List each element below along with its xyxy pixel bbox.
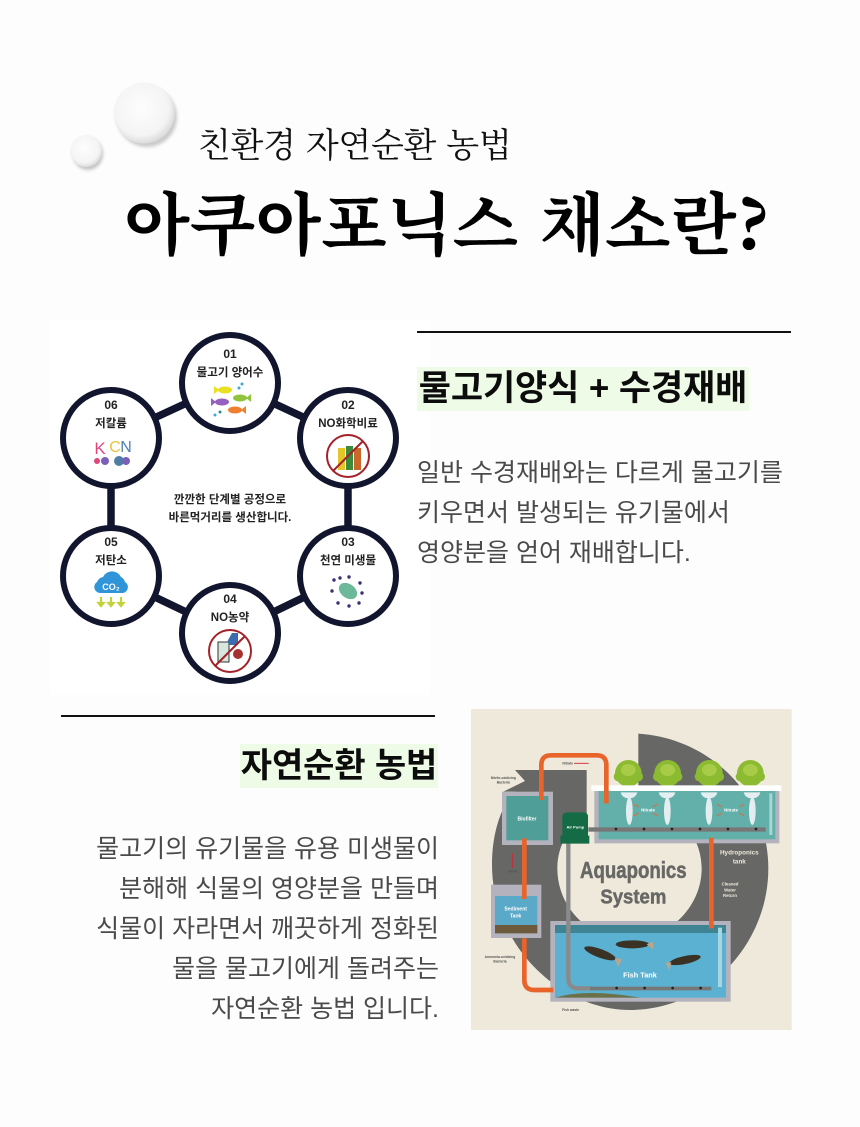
step 06: C	[109, 439, 121, 456]
small labels: Nitrite-oxidizing	[491, 776, 516, 780]
step 05: CO₂	[102, 582, 120, 592]
step 03: 03	[341, 535, 355, 549]
ring labels: tank	[733, 859, 746, 866]
sediment tank	[491, 885, 541, 938]
orange pipes	[524, 755, 711, 990]
arrows	[512, 763, 589, 868]
hydroponics tank: Nitrate	[641, 808, 655, 813]
step 06	[63, 390, 159, 486]
step 04: NO농약	[211, 611, 250, 624]
ring labels: Hydroponics	[720, 849, 759, 856]
panel: six-step cycle diagram	[60, 332, 399, 684]
air pump: Air Pump	[566, 825, 585, 830]
text block: description one: 일반 수경재배와는 다르게 물고기를	[417, 459, 783, 487]
step 03	[300, 528, 396, 624]
step 02: 02	[341, 398, 355, 412]
text block: description two: 분해해 식물의 영양분을 만들며	[119, 875, 439, 903]
air pipe	[568, 842, 590, 988]
icon: water drops	[70, 82, 178, 172]
step 06: 06	[104, 398, 118, 412]
biofilter tank: Biofilter	[518, 816, 536, 822]
fish tank	[550, 921, 731, 1002]
divider bottom	[61, 715, 435, 716]
text block: description two: 식물이 자라면서 깨끗하게 정화된	[96, 915, 439, 943]
system title: Aquaponics	[580, 857, 687, 883]
cycle centre caption: 깐깐한 단계별 공정으로	[174, 492, 287, 506]
divider top	[417, 331, 791, 332]
fish tank: Fish Tank	[623, 971, 658, 980]
chart: aquaponics system diagram	[471, 709, 792, 1030]
step 06: N	[120, 439, 132, 456]
system title: System	[600, 886, 666, 909]
hydroponics tank: Nitrate	[724, 808, 738, 813]
step 02	[300, 390, 396, 486]
step 01	[182, 335, 278, 431]
text block: description two	[96, 835, 439, 1023]
ring labels: Return	[723, 893, 737, 898]
small labels: Ammonia-oxidizing	[485, 955, 515, 959]
step 06: 저칼륨	[95, 416, 127, 430]
small labels: Fish waste	[562, 1008, 579, 1012]
small labels: Bacteria	[497, 780, 510, 784]
step 05: 05	[104, 535, 118, 549]
step 04	[182, 585, 278, 681]
heading: fish + hydroponics: 물고기양식 + 수경재배	[419, 369, 747, 408]
text block: description two: 자연순환 농법 입니다.	[211, 995, 439, 1023]
small labels: Nitrate	[562, 762, 573, 766]
ring labels	[720, 849, 759, 898]
ring labels: Cleaned	[722, 882, 739, 887]
system title	[580, 857, 687, 909]
text block: description two: 물고기의 유기물을 유용 미생물이	[96, 835, 439, 863]
step 05: 저탄소	[95, 553, 127, 567]
text block: description one: 키우면서 발생되는 유기물에서	[417, 499, 730, 527]
biofilter tank	[502, 792, 553, 845]
sediment tank: Tank	[510, 913, 522, 919]
step 05	[63, 528, 159, 624]
title: 아쿠아포닉스 채소란?	[124, 172, 769, 269]
text block: description one	[417, 459, 783, 567]
cycle centre caption	[169, 492, 291, 524]
step 01: 01	[223, 347, 237, 361]
cycle centre caption: 바른먹거리를 생산합니다.	[169, 510, 291, 524]
air pump	[560, 812, 589, 844]
grey cycle ring	[492, 734, 768, 1010]
step 04: 04	[223, 592, 237, 606]
step 03: 천연 미생물	[320, 553, 376, 567]
heading: natural circulation: 자연순환 농법	[241, 747, 437, 785]
text block: description two: 물을 물고기에게 돌려주는	[172, 955, 439, 983]
subtitle: 친환경 자연순환 농법	[198, 118, 511, 167]
hydroponics tank	[588, 760, 781, 843]
step 01: 물고기 양어수	[197, 365, 264, 379]
ring labels: Water	[724, 887, 736, 892]
sediment tank: Sediment	[504, 906, 527, 912]
step 06: K	[94, 439, 106, 458]
step 02: NO화학비료	[318, 416, 378, 430]
text block: description one: 영양분을 얻어 재배합니다.	[417, 539, 691, 567]
small labels: Bacteria	[493, 959, 507, 963]
small labels: Nitrite	[508, 870, 518, 874]
small labels	[485, 762, 579, 1012]
